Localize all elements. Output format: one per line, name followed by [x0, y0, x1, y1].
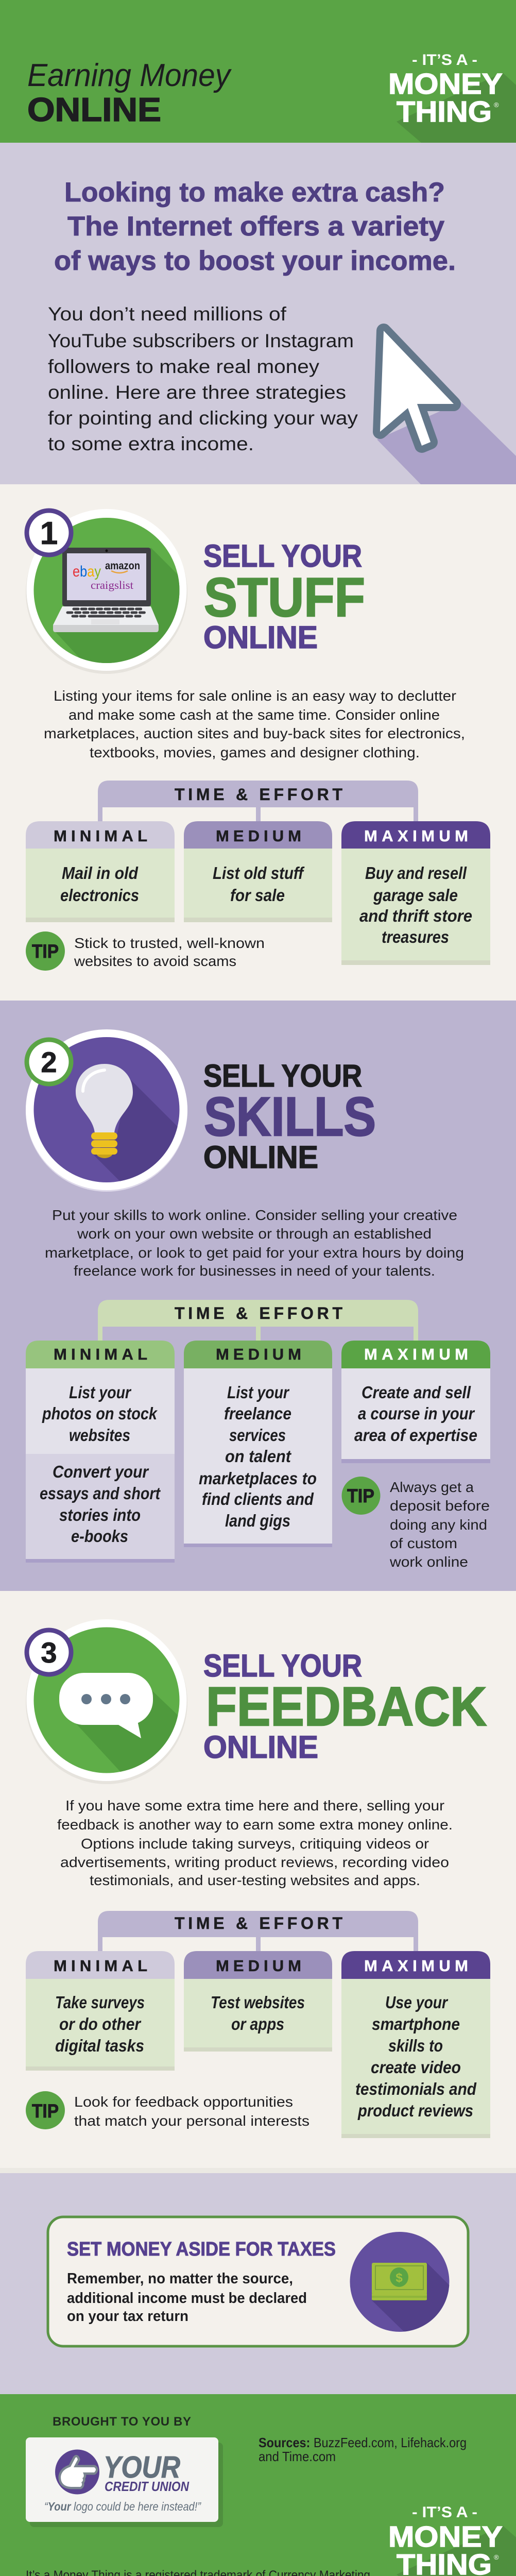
number badge 1	[27, 511, 71, 555]
intro text: YouTube subscribers or Instagram	[48, 330, 354, 351]
callout box: additional income must be declared	[67, 2290, 307, 2307]
column: medium: List your	[227, 1383, 290, 1402]
callout box: SET MONEY ASIDE FOR TAXES	[67, 2239, 336, 2260]
column: medium: find clients and	[202, 1489, 314, 1509]
tip: websites to avoid scams	[74, 953, 236, 969]
tip: Look for feedback opportunities	[74, 2094, 293, 2110]
description: textbooks, movies, games and designer clothing.	[90, 744, 420, 760]
description: and make some cash at the same time. Consider online	[68, 707, 440, 723]
column: minimal: digital tasks	[55, 2036, 144, 2055]
column: maximum: MAXIMUM	[364, 1345, 468, 1363]
tip: of custom	[390, 1535, 457, 1551]
description: freelance work for businesses in need of your talents.	[74, 1263, 435, 1279]
column: minimal	[26, 1341, 175, 1563]
tip	[342, 1477, 490, 1570]
column: maximum: product reviews	[357, 2101, 473, 2120]
logo: It's a Money Thing: - IT’S A -	[412, 52, 477, 69]
column: maximum: and thrift store	[359, 906, 472, 925]
column: minimal: electronics	[60, 886, 139, 905]
column: maximum: area of expertise	[354, 1426, 477, 1445]
icon: laptop in green circle: craigslist	[91, 579, 133, 591]
heading	[203, 1648, 487, 1765]
time and effort bar: TIME & EFFORT	[175, 1914, 342, 1933]
heading: FEEDBACK	[206, 1675, 487, 1737]
column: medium: marketplaces to	[199, 1469, 317, 1488]
tip: doing any kind	[390, 1517, 487, 1533]
column: minimal	[26, 1951, 175, 2071]
logo: It's a Money Thing	[388, 2504, 503, 2576]
tip: TIP	[347, 1485, 374, 1506]
logo: It's a Money Thing: MONEY	[388, 67, 503, 100]
column: minimal: Mail in old	[62, 863, 139, 883]
number badge 2	[27, 1040, 71, 1084]
sources: Sources: BuzzFeed.com, Lifehack.org	[259, 2435, 467, 2450]
number badge 2: 2	[41, 1046, 57, 1078]
tip: Always get a	[390, 1479, 474, 1495]
column: minimal: essays and short	[40, 1484, 161, 1503]
description: If you have some extra time here and there, selling your	[65, 1798, 444, 1814]
icon: cash in purple circle	[350, 2232, 449, 2332]
column: maximum: Buy and resell	[365, 863, 467, 883]
tip: work online	[389, 1554, 468, 1570]
heading	[203, 538, 365, 655]
description: advertisements, writing product reviews, recording video	[60, 1854, 449, 1870]
callout box: Remember, no matter the source,	[67, 2270, 293, 2287]
column: maximum: garage sale	[373, 886, 458, 905]
tip	[26, 2091, 309, 2129]
logo: It's a Money Thing: THING	[397, 95, 492, 128]
icon: laptop in green circle: amazon	[105, 560, 140, 572]
panel: taxes	[0, 2168, 516, 2394]
column: minimal: MINIMAL	[54, 827, 147, 845]
column: medium: or apps	[231, 2014, 284, 2033]
column: medium: Test websites	[211, 1993, 305, 2012]
logo: It's a Money Thing	[388, 52, 503, 128]
description: testimonials, and user-testing websites and apps.	[90, 1872, 420, 1888]
icon: laptop in green circle	[26, 509, 187, 674]
time and effort bar	[98, 1911, 418, 1951]
intro text: to some extra income.	[48, 433, 254, 454]
description: Options include taking surveys, critiquing videos or	[81, 1836, 429, 1852]
description	[45, 1207, 464, 1279]
intro text: for pointing and clicking your way	[48, 408, 358, 429]
column: maximum	[341, 1951, 490, 2138]
column: maximum: treasures	[382, 927, 449, 946]
panel: intro	[0, 143, 516, 484]
icon: mouse cursor	[377, 331, 516, 484]
icon: speech bubble in green circle	[26, 1619, 187, 1784]
column: medium: services	[229, 1426, 286, 1445]
title: Earning Money	[27, 58, 232, 93]
tip	[26, 931, 265, 971]
heading: ONLINE	[203, 620, 318, 655]
heading: SELL YOUR	[203, 1648, 362, 1683]
column: minimal: MINIMAL	[54, 1957, 147, 1975]
column: medium: for sale	[230, 886, 285, 905]
sources	[259, 2435, 467, 2464]
description: Listing your items for sale online is an easy way to declutter	[54, 688, 456, 704]
panel: footer	[0, 2394, 516, 2576]
heading: ONLINE	[203, 1140, 318, 1175]
credit union logo card: CREDIT UNION	[105, 2479, 190, 2494]
icon: laptop in green circle: ebay	[73, 563, 101, 580]
column: maximum: MAXIMUM	[364, 1957, 468, 1975]
intro heading: The Internet offers a variety	[67, 211, 445, 242]
tip: TIP	[32, 2100, 59, 2122]
column: maximum: testimonials and	[355, 2079, 477, 2098]
intro text: followers to make real money	[48, 356, 320, 377]
callout box: on your tax return	[67, 2308, 188, 2325]
panel: strategy 3 sell your feedback	[25, 1619, 490, 2138]
column: medium: MEDIUM	[216, 1957, 301, 1975]
logo shadow	[397, 2526, 516, 2576]
number badge 3: 3	[41, 1636, 57, 1669]
time and effort bar: TIME & EFFORT	[175, 785, 342, 804]
intro heading: Looking to make extra cash?	[64, 177, 445, 208]
column: medium	[184, 1951, 332, 2052]
column: minimal: MINIMAL	[54, 1345, 147, 1363]
heading: STUFF	[204, 566, 365, 628]
heading: SELL YOUR	[203, 538, 362, 573]
heading: SELL YOUR	[203, 1058, 362, 1093]
time and effort bar: TIME & EFFORT	[175, 1304, 342, 1323]
logo: It's a Money Thing: - IT’S A -	[412, 2504, 477, 2521]
column: minimal: websites	[69, 1426, 130, 1445]
column: maximum: Use your	[385, 1993, 449, 2012]
column: maximum: skills to	[388, 2036, 443, 2055]
description	[44, 688, 465, 760]
number badge 3	[27, 1630, 71, 1674]
intro text	[48, 303, 358, 454]
tip: that match your personal interests	[74, 2113, 309, 2129]
intro text: You don’t need millions of	[48, 303, 287, 325]
callout box	[48, 2217, 468, 2346]
description	[57, 1798, 453, 1888]
credit union logo card	[26, 2437, 223, 2527]
column: medium: freelance	[224, 1404, 291, 1423]
title: ONLINE	[27, 91, 161, 128]
icon: cash in purple circle: $	[395, 2271, 403, 2285]
column: maximum: smartphone	[372, 2014, 460, 2033]
heading: ONLINE	[203, 1730, 318, 1765]
column: medium: land gigs	[225, 1511, 290, 1530]
logo: It's a Money Thing: ®	[494, 2553, 499, 2561]
panel: header	[0, 0, 516, 143]
column: medium	[184, 1341, 332, 1547]
time and effort bar	[98, 1300, 418, 1341]
column: maximum: MAXIMUM	[364, 827, 468, 845]
column: minimal: e-books	[71, 1527, 128, 1546]
logo: It's a Money Thing: MONEY	[388, 2520, 503, 2553]
time and effort bar	[98, 781, 418, 821]
heading	[203, 1058, 376, 1175]
intro text: online. Here are three strategies	[48, 382, 346, 403]
credit union logo card: YOUR	[104, 2450, 180, 2484]
column: maximum: create video	[371, 2058, 461, 2077]
description: work on your own website or through an established	[77, 1226, 432, 1242]
intro heading: of ways to boost your income.	[54, 246, 456, 276]
column: minimal: photos on stock	[42, 1404, 158, 1423]
column: minimal: Convert your	[53, 1462, 149, 1481]
panel: strategy 1 sell your stuff	[25, 508, 490, 971]
column: minimal: Take surveys	[55, 1993, 145, 2012]
tip: deposit before	[390, 1498, 490, 1514]
description: feedback is another way to earn some extra money online.	[57, 1817, 453, 1833]
description: marketplaces, auction sites and buy-back sites for electronics,	[44, 725, 465, 741]
column: maximum	[341, 821, 490, 965]
column: minimal: stories into	[59, 1505, 141, 1524]
column: minimal	[26, 821, 175, 922]
column: minimal: List your	[69, 1383, 132, 1402]
column: medium: List old stuff	[213, 863, 305, 883]
sources: and Time.com	[259, 2449, 336, 2464]
tip: Stick to trusted, well-known	[74, 935, 265, 951]
column: medium	[184, 821, 332, 922]
description: marketplace, or look to get paid for your extra hours by doing	[45, 1245, 464, 1261]
icon: light bulb in purple circle	[26, 1029, 187, 1192]
column: maximum	[341, 1341, 490, 1463]
panel: strategy 2 sell your skills	[0, 1001, 516, 1591]
heading: SKILLS	[204, 1086, 376, 1147]
column: medium: MEDIUM	[216, 827, 301, 845]
credit union logo card: “Your logo could be here instead!”	[44, 2500, 201, 2513]
logo: It's a Money Thing: ®	[494, 101, 499, 109]
brought to you by: BROUGHT TO YOU BY	[53, 2415, 191, 2429]
logo shadow	[397, 73, 516, 143]
tip: TIP	[32, 941, 59, 962]
title	[27, 58, 232, 128]
column: medium: MEDIUM	[216, 1345, 301, 1363]
column: minimal: or do other	[59, 2014, 142, 2033]
description: Put your skills to work online. Consider selling your creative	[52, 1207, 457, 1223]
number badge 1: 1	[40, 516, 58, 551]
column: maximum: a course in your	[358, 1404, 475, 1423]
intro heading	[54, 177, 456, 276]
column: maximum: Create and sell	[362, 1383, 471, 1402]
column: medium: on talent	[225, 1447, 292, 1466]
